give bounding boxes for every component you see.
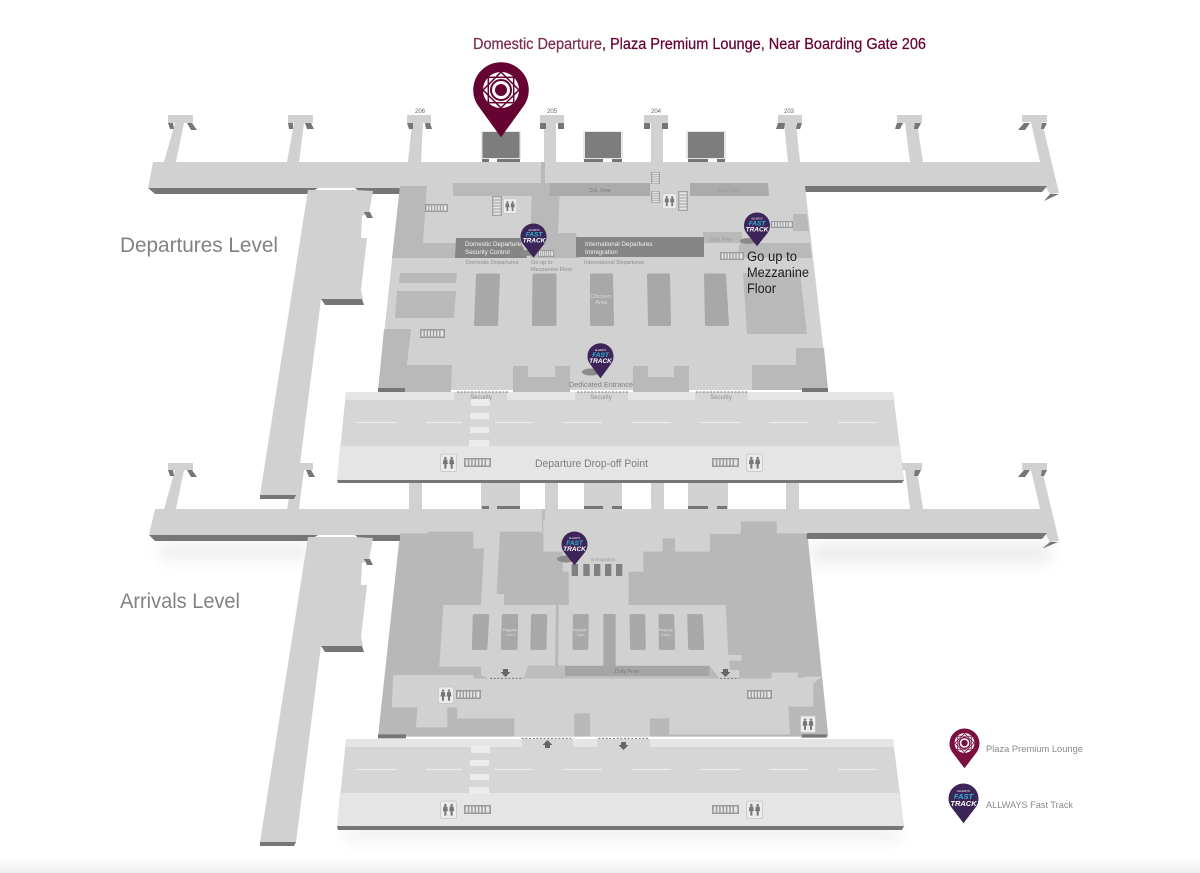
concourse dark edge: [148, 186, 1047, 194]
callout: go up to mezzanine floor: Floor: [747, 281, 776, 296]
icon: fast track pin, arrivals immigration: ALLWAYS: [569, 537, 580, 540]
concourse dark edge: [149, 533, 1047, 541]
departures labels: Domestic Departures: [465, 241, 524, 248]
walkway end caps: [260, 212, 373, 499]
check-in islands: [476, 275, 728, 324]
walkway end caps: [260, 559, 373, 846]
departures labels: D.E. Free: [589, 188, 611, 194]
icon: fast track pin, domestic security: TRACK: [523, 238, 547, 244]
departures labels: 203: [784, 109, 795, 115]
upper block: [741, 522, 777, 535]
departures labels: International Departures: [585, 241, 653, 248]
icon: fast track pin, domestic security: [518, 224, 547, 257]
legend: [949, 729, 1083, 822]
terminal dark feet: [378, 533, 840, 738]
icon: fast track pin, international immigration: FAST: [749, 220, 766, 228]
departures labels: Departure Drop-off Point: [535, 458, 648, 470]
icon: fast track pin, arrivals immigration: FAST: [566, 540, 584, 547]
callout: go up to mezzanine floor: Mezzanine: [747, 265, 809, 280]
light corridors: [392, 520, 822, 737]
icon: fast track pin, international immigration: ALLWAYS: [751, 218, 763, 220]
callout: go up to mezzanine floor: Go up to: [747, 249, 797, 264]
central corridor: [603, 614, 616, 667]
legend icon: plaza premium lounge: [950, 729, 979, 768]
legend icon: fast track: TRACK: [950, 799, 977, 808]
departures labels: Dedicated Entrance: [569, 380, 633, 389]
immigration box: [576, 237, 704, 257]
departures labels: 205: [547, 109, 558, 115]
level heading: arrivals: Arrivals Level: [120, 590, 240, 613]
concourse band: [148, 162, 1050, 188]
back of house areas: [378, 162, 828, 392]
title: Domestic Departure, Plaza Premium Lounge, Near Boarding Gate 206: [473, 36, 926, 53]
icon: fast track pin, dedicated entrance: ALLWAYS: [595, 349, 606, 352]
callout: go up to mezzanine floor: [747, 249, 809, 296]
departures labels: Security: [470, 395, 492, 401]
arrivals labels: Duty Free: [615, 669, 639, 675]
departures icons: lifts and stairs: [420, 172, 793, 471]
departures labels: Mezzanine Floor: [531, 267, 572, 273]
legend text: fast track: ALLWAYS Fast Track: [986, 800, 1073, 811]
arrivals labels: Claim: [575, 633, 585, 637]
departures labels: Security Control: [465, 249, 510, 256]
departures labels: Security: [590, 395, 612, 401]
arrivals labels: [503, 557, 673, 675]
departures labels: Duty Free: [710, 237, 732, 243]
legend icon: fast track: [949, 784, 978, 822]
icon: fast track pin, international immigration: TRACK: [746, 226, 770, 234]
level heading: departures: Departures Level: [120, 234, 278, 257]
departures labels: International Departures: [584, 260, 644, 266]
security control box: [455, 238, 527, 258]
departures labels: Security: [710, 395, 732, 401]
terminal dark feet: [378, 388, 828, 392]
legend icon: fast track: ALLWAYS: [957, 789, 970, 793]
floor base: [378, 533, 828, 737]
departures road: [337, 392, 904, 483]
arrivals labels: Immigration: [590, 557, 616, 563]
departures labels: 206: [415, 109, 426, 115]
baggage islands: [473, 616, 703, 648]
departures labels: Immigration: [585, 249, 618, 256]
departures labels: Area: [595, 300, 608, 306]
pier hooks: [168, 470, 1059, 548]
departures labels: Duty Free: [718, 188, 740, 194]
concourse band: [149, 509, 1050, 535]
arrivals labels: Claim: [505, 633, 515, 637]
pier group: [164, 463, 1059, 542]
walkway to remote gates: [260, 190, 373, 495]
arrivals labels: Baggage: [573, 628, 587, 632]
arrivals level: concourse and piers: [149, 463, 1059, 846]
legend text: plaza premium lounge: Plaza Premium Lounge: [986, 744, 1083, 755]
duty free strip: [565, 666, 709, 676]
arrivals labels: Claim: [661, 633, 671, 637]
duty free strips: [549, 183, 769, 196]
departures labels: Chicken: [591, 294, 611, 300]
immigration booths: [572, 564, 622, 576]
departures labels: Go up to: [531, 260, 552, 266]
walk-through dotted lines: [490, 678, 739, 738]
departures level: piers: [148, 115, 1059, 499]
icon: fast track pin, arrivals immigration: [557, 532, 587, 564]
pier hooks: [168, 123, 1059, 201]
page bottom fade: [0, 858, 1200, 873]
boarding gates: [481, 131, 726, 162]
departures labels: 204: [651, 109, 662, 115]
arrivals labels: Baggage: [659, 628, 673, 632]
arrivals road: [337, 739, 904, 830]
icon: plaza premium lounge pin: [474, 63, 528, 136]
centre divider: [542, 509, 545, 535]
walkway to remote gates: [260, 537, 373, 842]
departures terminal floor: [378, 162, 828, 392]
floor base: [378, 186, 828, 390]
icon: fast track pin, dedicated entrance: TRACK: [589, 358, 613, 365]
icon: fast track pin, dedicated entrance: [582, 344, 613, 378]
arrivals arrows: [500, 669, 730, 750]
arrivals icons: lifts and stairs: [438, 687, 816, 818]
icon: fast track pin, domestic security: ALLWAYS: [528, 229, 540, 232]
soft shadows: [160, 130, 1050, 840]
legend icon: fast track: FAST: [954, 792, 975, 801]
departures labels: Domestic Departures: [466, 260, 519, 266]
departures labels: [415, 109, 795, 470]
arrivals labels: Baggage: [503, 628, 517, 632]
pier group: [164, 115, 1059, 194]
icon: fast track pin, dedicated entrance: FAST: [592, 352, 610, 359]
icon: fast track pin, arrivals immigration: TRACK: [563, 546, 587, 553]
icon: fast track pin, international immigration: [740, 213, 770, 246]
arrivals terminal floor: [378, 520, 840, 738]
icon: fast track pin, domestic security: FAST: [526, 232, 543, 238]
